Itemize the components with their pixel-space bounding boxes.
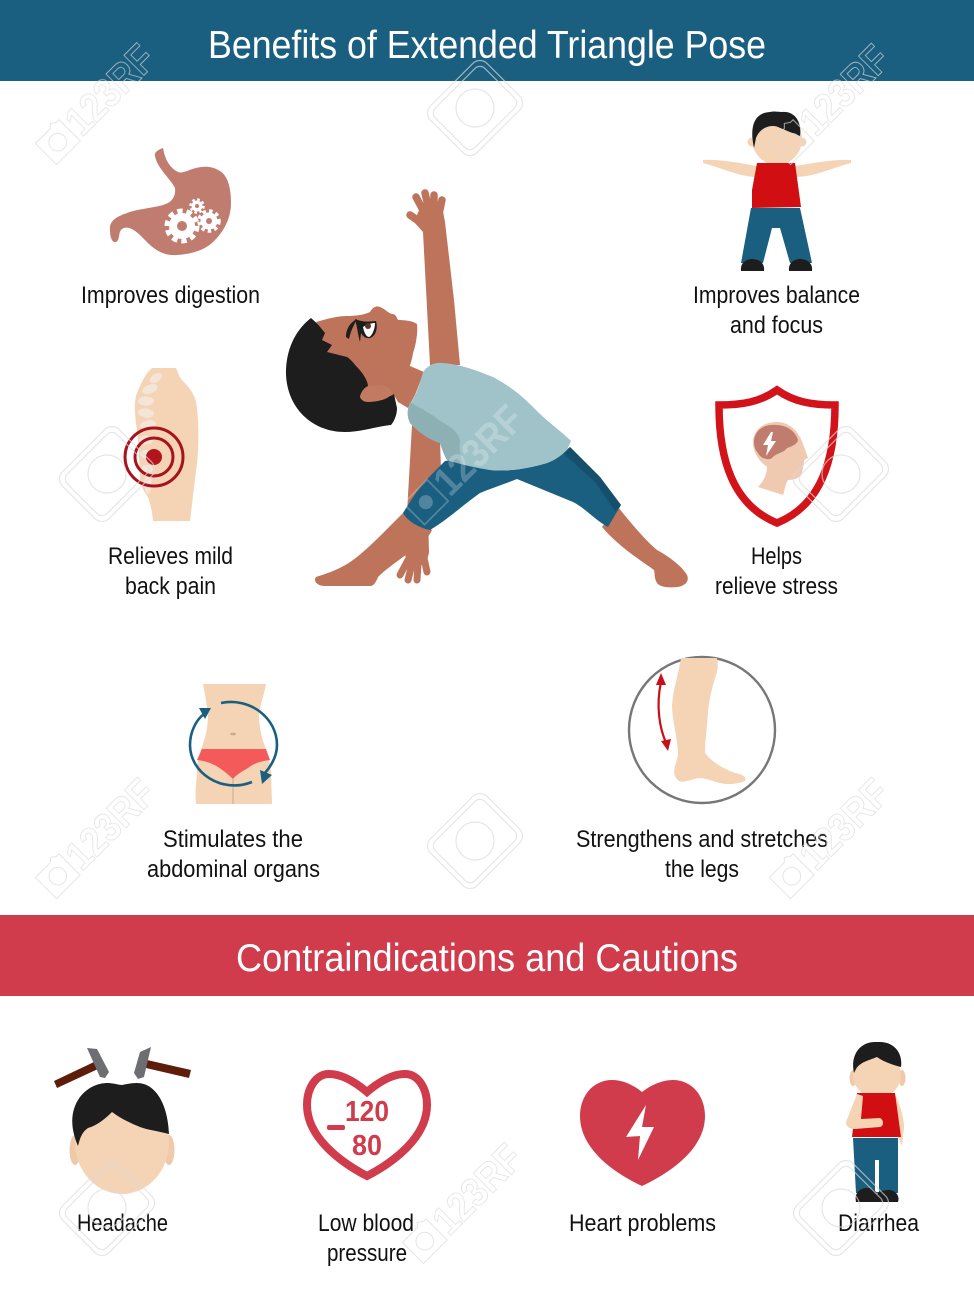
front leg and foot bbox=[315, 513, 432, 586]
label: improves balance and focus bbox=[693, 282, 860, 339]
blood pressure numbers: 80 bbox=[352, 1130, 382, 1162]
central figure: extended triangle pose bbox=[286, 193, 688, 587]
neck bbox=[392, 366, 424, 408]
watermarks: 123RF bbox=[423, 1135, 531, 1243]
label: improves balance and focus: and focus bbox=[730, 312, 823, 339]
label: stimulates the abdominal organs: Stimulates the bbox=[163, 826, 303, 853]
label: strengthens and stretches the legs: the legs bbox=[665, 856, 739, 883]
ear bbox=[360, 385, 393, 402]
icon: standing boy with arms out bbox=[703, 112, 851, 271]
label: low blood pressure: pressure bbox=[327, 1240, 407, 1267]
lower arm and hand bbox=[400, 425, 441, 580]
blood pressure numbers bbox=[345, 1096, 389, 1162]
icon: leg in circle with stretch arrow bbox=[629, 657, 775, 803]
label: diarrhea: Diarrhea bbox=[838, 1210, 920, 1237]
label: relieves mild back pain bbox=[108, 543, 233, 600]
label: relieves mild back pain: Relieves mild bbox=[108, 543, 233, 570]
watermarks: 123RF bbox=[424, 396, 532, 504]
icon: shield with head and brain bbox=[719, 390, 835, 523]
icon: headache with hammers bbox=[54, 1047, 191, 1194]
label: headache: Headache bbox=[77, 1210, 168, 1237]
watermarks: 123RF bbox=[56, 36, 164, 144]
label: improves digestion: Improves digestion bbox=[81, 282, 260, 309]
label: stimulates the abdominal organs: abdominal organs bbox=[147, 856, 320, 883]
shorts bbox=[403, 447, 621, 530]
label: low blood pressure: Low blood bbox=[318, 1210, 414, 1237]
blood pressure numbers: 120 bbox=[345, 1096, 389, 1128]
eye and brow bbox=[346, 319, 377, 342]
title: Benefits of Extended Triangle Pose bbox=[208, 24, 766, 67]
label: helps relieve stress bbox=[715, 543, 838, 600]
face bbox=[316, 306, 417, 402]
label: relieves mild back pain: back pain bbox=[125, 573, 216, 600]
header band: contraindications title bbox=[0, 915, 974, 996]
label: heart problems: Heart problems bbox=[569, 1210, 716, 1237]
icon: stomach with gears bbox=[110, 148, 231, 255]
title: Contraindications and Cautions bbox=[236, 937, 738, 980]
icon: low blood pressure heart bbox=[307, 1074, 427, 1176]
watermarks: 123RF bbox=[790, 36, 898, 144]
icon: boy holding stomach bbox=[846, 1042, 906, 1202]
watermarks: 123RF bbox=[56, 770, 164, 878]
label: helps relieve stress: Helps bbox=[751, 543, 802, 570]
label: improves balance and focus: Improves balance bbox=[693, 282, 860, 309]
back leg and foot bbox=[602, 507, 688, 587]
label: low blood pressure bbox=[318, 1210, 414, 1267]
label: strengthens and stretches the legs bbox=[576, 826, 828, 883]
icon: back with pain target bbox=[125, 368, 198, 521]
watermarks: 123RF bbox=[790, 770, 898, 878]
icon: abdomen with circular arrows bbox=[190, 684, 277, 804]
hair bbox=[286, 318, 397, 432]
icon: heart with lightning bolt bbox=[580, 1080, 705, 1186]
raised arm and hand bbox=[410, 193, 460, 365]
label: strengthens and stretches the legs: Strengthens and stretches bbox=[576, 826, 828, 853]
header band: benefits title bbox=[0, 0, 974, 81]
shirt bbox=[408, 363, 571, 471]
label: stimulates the abdominal organs bbox=[147, 826, 320, 883]
label: helps relieve stress: relieve stress bbox=[715, 573, 838, 600]
